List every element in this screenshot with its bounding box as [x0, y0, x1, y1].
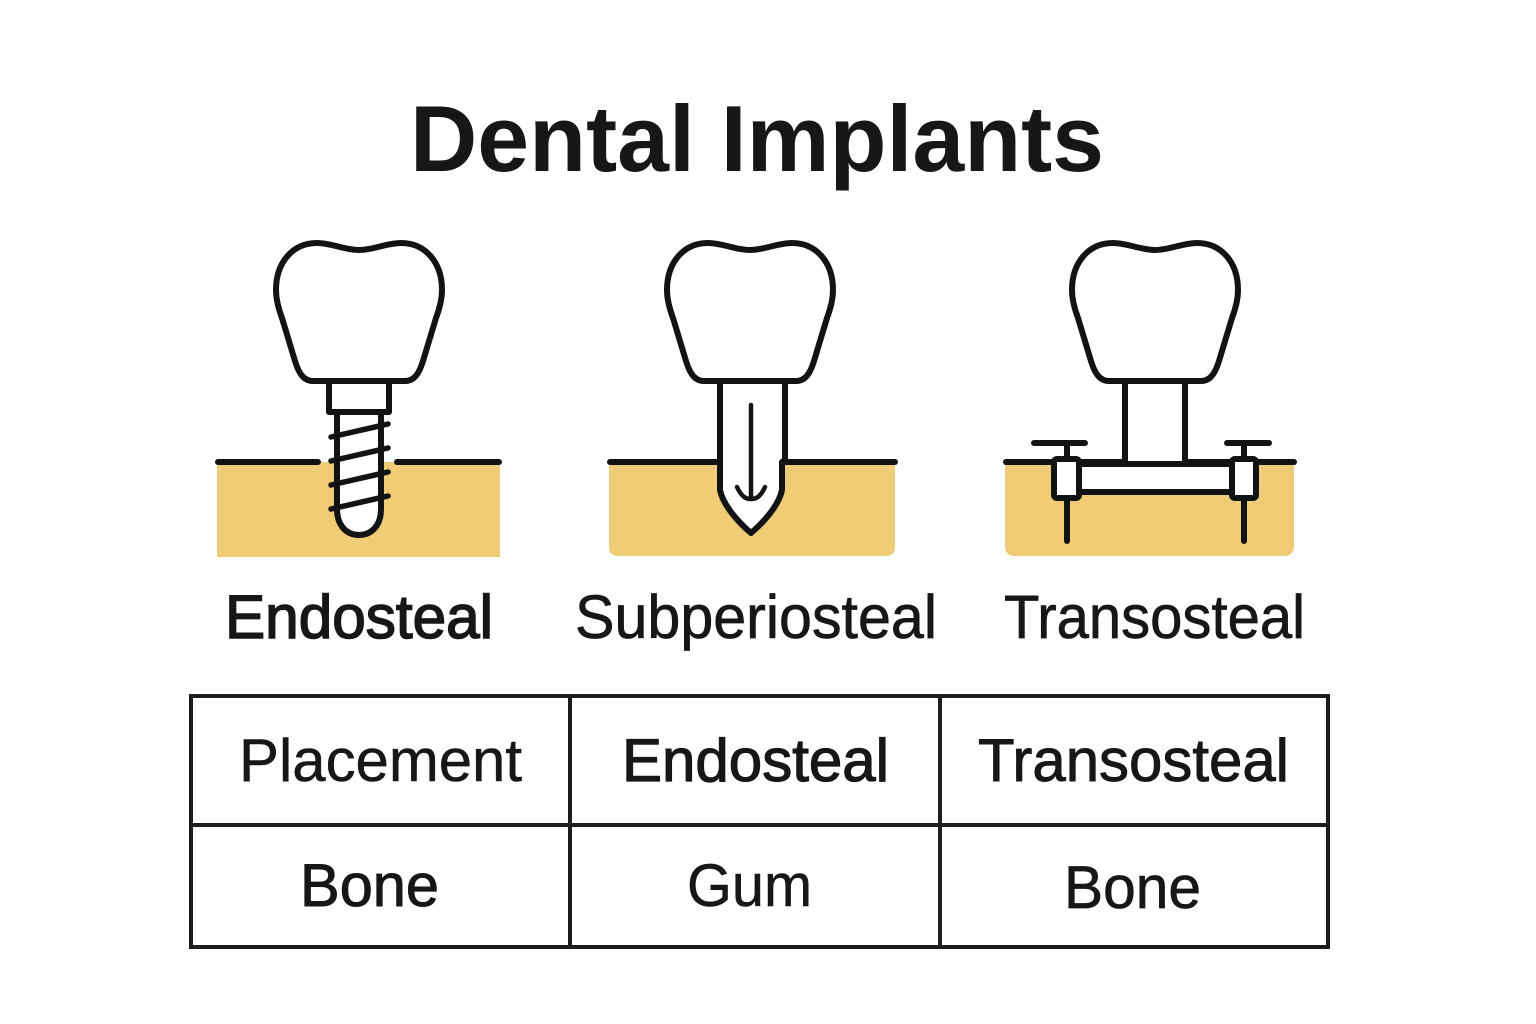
panel: subperiosteal implant illustration — [609, 243, 895, 556]
label: endosteal: Endosteal — [225, 583, 493, 651]
crown: transosteal — [1072, 243, 1238, 381]
cell: Gum: Gum — [687, 852, 812, 919]
implant screw body — [337, 411, 381, 535]
cell: Bone (col 1): Bone — [300, 852, 439, 919]
crown: endosteal — [276, 243, 442, 381]
right clamp — [1232, 459, 1256, 498]
panel: transosteal implant illustration — [1005, 243, 1294, 556]
arrow down — [737, 405, 765, 499]
bone: subperiosteal — [609, 462, 895, 556]
left pin — [1034, 443, 1085, 541]
label: transosteal: Transosteal — [1004, 583, 1305, 651]
cell: Transosteal: Transosteal — [978, 727, 1289, 794]
cell: Placement: Placement — [239, 727, 522, 794]
title: Dental Implants — [410, 86, 1104, 191]
gum line: subperiosteal — [610, 459, 895, 465]
right pin — [1227, 443, 1269, 541]
comparison table — [191, 696, 1328, 947]
panel: endosteal implant illustration — [217, 243, 500, 557]
bone: transosteal — [1005, 462, 1294, 556]
cell: Endosteal: Endosteal — [622, 727, 889, 794]
implant threads — [331, 424, 388, 509]
crown: subperiosteal — [667, 243, 833, 381]
gum line: transosteal — [1006, 459, 1294, 465]
bone: endosteal — [217, 462, 500, 557]
left clamp — [1054, 459, 1079, 498]
connecting bar — [1070, 464, 1250, 492]
table grid — [191, 696, 1328, 947]
post — [1125, 381, 1185, 464]
abutment — [329, 381, 389, 412]
implant post — [720, 381, 785, 533]
cell: Bone (col 3): Bone — [1064, 854, 1201, 921]
label: subperiosteal: Subperiosteal — [575, 583, 937, 651]
gum line: endosteal — [218, 459, 499, 465]
